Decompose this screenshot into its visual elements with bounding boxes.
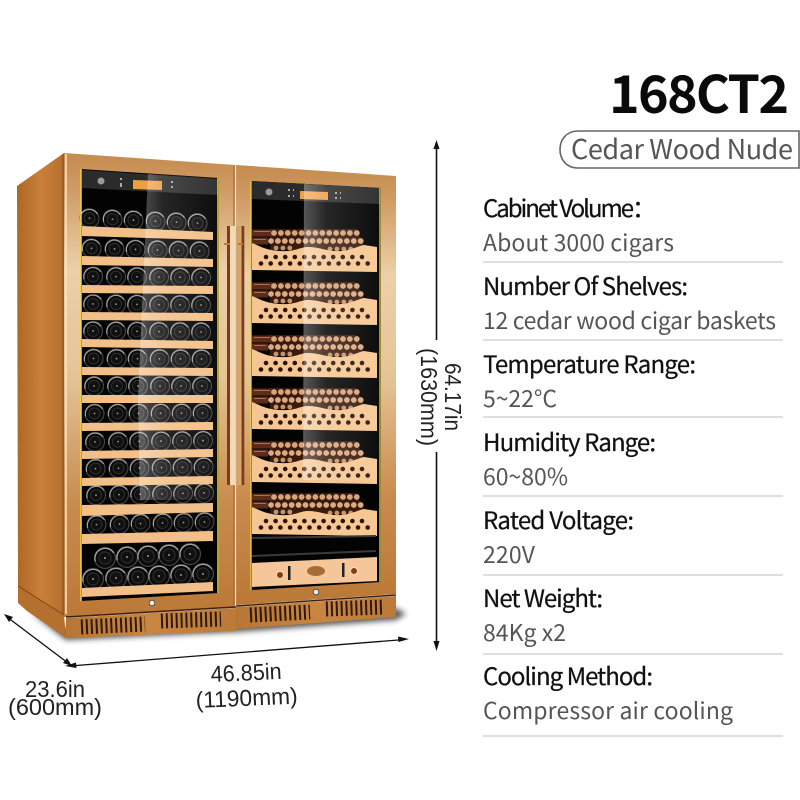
depth dimension arrow [4, 614, 72, 666]
width label: (1190mm) [195, 683, 298, 713]
cigar baskets [252, 229, 377, 536]
width label: 46.85in [210, 658, 282, 687]
window trim [81, 169, 218, 601]
depth label: 23.6in [25, 676, 85, 702]
spec: number of shelves [483, 267, 783, 340]
right door [236, 165, 396, 606]
door frame [236, 165, 396, 605]
spec: rated voltage: 220V [483, 536, 536, 570]
vent slats [81, 607, 384, 627]
bottle rows [80, 208, 214, 589]
spec: cooling method [483, 657, 783, 736]
door lock [313, 589, 319, 595]
spec: net weight [483, 579, 783, 654]
cabinet illustration [17, 153, 406, 640]
control display [252, 181, 380, 204]
width label [195, 658, 298, 713]
height label [416, 348, 466, 446]
glass reflection [303, 184, 380, 480]
glass window [81, 169, 219, 601]
spec: cooling method: Cooling Method: [483, 657, 653, 692]
depth label: (600mm) [8, 694, 102, 720]
spec: net weight: Net Weight: [483, 579, 603, 614]
height dimension arrow [434, 140, 440, 651]
spec: rated voltage: Rated Voltage: [483, 501, 634, 536]
glass reflection [138, 174, 218, 500]
spec: cabinet volume [483, 189, 783, 262]
spec: humidity range: 60~80% [483, 458, 568, 492]
humidifier control panel [252, 557, 377, 587]
spec: cooling method: Compressor air cooling [483, 692, 733, 726]
left door [63, 153, 235, 617]
spec: number of shelves: 12 cedar wood cigar baskets [483, 302, 776, 336]
floor shadow [30, 608, 406, 640]
spec: cabinet volume: About 3000 cigars [483, 224, 674, 258]
spec: humidity range [483, 423, 783, 496]
spec: net weight: 84Kg x2 [483, 614, 566, 648]
spec: temperature range [483, 345, 783, 417]
cabinet side panel [17, 153, 66, 638]
spec: cabinet volume: Cabinet Volume： [483, 189, 656, 224]
depth label [8, 676, 102, 720]
door frame [64, 153, 235, 617]
color badge: Cedar Wood Nude [571, 128, 793, 167]
control display [82, 170, 218, 195]
glass window [251, 181, 381, 590]
base with vents [66, 595, 396, 638]
spec: temperature range: 5~22°C [483, 380, 557, 414]
width dimension arrow [65, 636, 409, 668]
window trim [251, 181, 380, 590]
wine shelves [82, 226, 213, 597]
door handles [224, 226, 244, 485]
height label: (1630mm) [416, 348, 442, 446]
spec: humidity range: Humidity Range: [483, 423, 656, 458]
spec: number of shelves: Number Of Shelves: [483, 267, 688, 302]
height label: 64.17in [440, 363, 466, 431]
spec: temperature range: Temperature Range: [483, 345, 696, 380]
lower empty shelf [252, 536, 376, 556]
title: 168CT2 [609, 53, 789, 128]
door lock [149, 600, 155, 606]
spec: rated voltage [483, 501, 783, 575]
